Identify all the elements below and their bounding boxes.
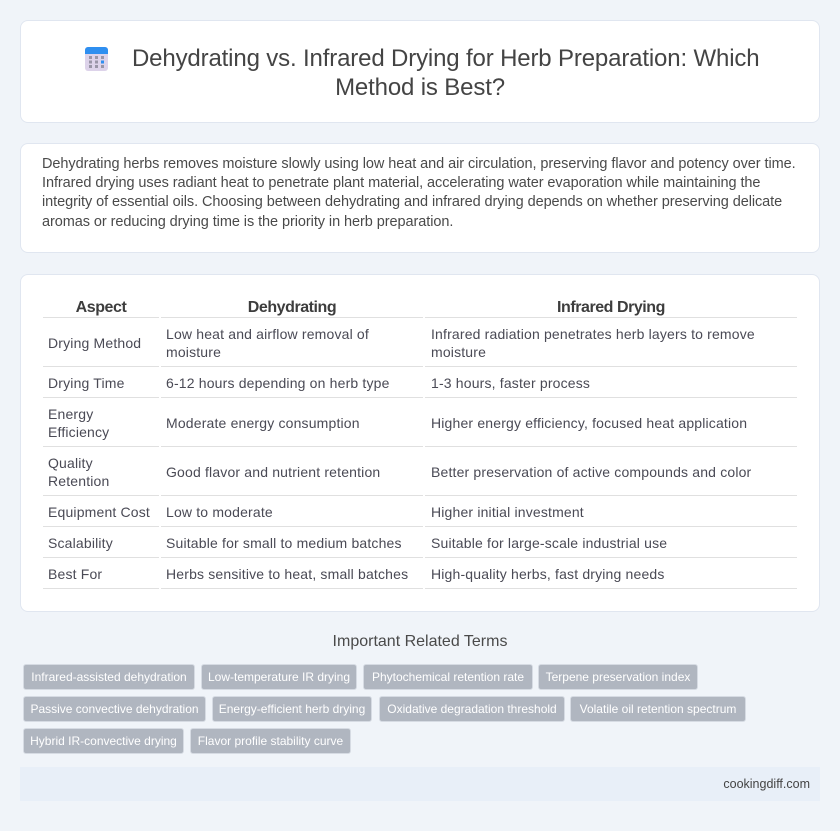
tag [190, 728, 351, 754]
tag: Hybrid IR-convective drying [30, 734, 177, 748]
footer source text: cookingdiff.com [723, 777, 810, 791]
text block: description: aromas or reducing drying time is the priority in herb preparation. [42, 214, 453, 230]
row: equipment cost: Low to moderate [166, 504, 273, 520]
row: drying time [48, 375, 590, 391]
tag: Energy-efficient herb drying [219, 702, 365, 716]
tag: Flavor profile stability curve [198, 734, 343, 748]
row: drying time: 1-3 hours, faster process [431, 375, 590, 391]
row: drying method: Infrared radiation penetrates herb layers to remove [431, 326, 755, 342]
tag [212, 696, 372, 722]
row: scalability: Scalability [48, 535, 113, 551]
row: energy efficiency: Efficiency [48, 424, 109, 440]
text block: description: integrity of essential oils. Choosing between dehydrating and infrared drying depends on whether preserving delicate [42, 194, 782, 210]
icon: calendar [85, 47, 108, 71]
row: best for [48, 566, 665, 582]
table: comparison [43, 299, 797, 589]
row: equipment cost: Higher initial investment [431, 504, 584, 520]
row: drying method [48, 326, 755, 360]
tag [201, 664, 357, 690]
row: energy efficiency: Higher energy efficiency, focused heat application [431, 415, 747, 431]
row: best for: High-quality herbs, fast drying needs [431, 566, 665, 582]
table header: Infrared Drying [557, 299, 665, 316]
text block: description [42, 156, 796, 230]
tag [23, 696, 206, 722]
panel: description [20, 143, 820, 253]
row: drying time: 6-12 hours depending on herb type [166, 375, 390, 391]
row: quality retention: Better preservation of active compounds and color [431, 464, 751, 480]
tag: Passive convective dehydration [30, 702, 199, 716]
tag [23, 664, 195, 690]
row: scalability: Suitable for large-scale industrial use [431, 535, 667, 551]
tag: Volatile oil retention spectrum [580, 702, 736, 716]
row: best for: Best For [48, 566, 102, 582]
tag: Infrared-assisted dehydration [31, 670, 187, 684]
row: energy efficiency: Moderate energy consumption [166, 415, 360, 431]
tag list: related terms [23, 664, 746, 754]
tag [23, 728, 184, 754]
row: quality retention [48, 455, 751, 489]
title [132, 45, 759, 101]
row: quality retention: Good flavor and nutrient retention [166, 464, 380, 480]
row: drying method: Low heat and airflow removal of [166, 326, 369, 342]
tag: Terpene preservation index [546, 670, 690, 684]
title: Method is Best? [335, 74, 505, 101]
tag [363, 664, 533, 690]
row: quality retention: Quality [48, 455, 93, 471]
row: drying method: moisture [166, 344, 221, 360]
row: equipment cost: Equipment Cost [48, 504, 150, 520]
row: drying method: Drying Method [48, 335, 141, 351]
row: best for: Herbs sensitive to heat, small batches [166, 566, 408, 582]
row: drying method: moisture [431, 344, 486, 360]
table header: Aspect [76, 299, 126, 316]
row: energy efficiency: Energy [48, 406, 93, 422]
table header [76, 299, 665, 316]
title: Dehydrating vs. Infrared Drying for Herb Preparation: Which [132, 45, 759, 72]
row: equipment cost [48, 504, 584, 520]
row: quality retention: Retention [48, 473, 109, 489]
panel: comparison table [20, 274, 820, 612]
table header: Dehydrating [248, 299, 336, 316]
row: scalability: Suitable for small to medium batches [166, 535, 402, 551]
heading: related terms: Important Related Terms [333, 633, 507, 650]
tag [538, 664, 698, 690]
tag: Oxidative degradation threshold [387, 702, 557, 716]
row: drying time: Drying Time [48, 375, 125, 391]
text block: description: Infrared drying uses radiant heat to penetrate plant material, accelerating water evaporation while maintaining the [42, 175, 760, 191]
tag [379, 696, 565, 722]
footer [20, 767, 820, 801]
row: scalability [48, 535, 667, 551]
tag: Phytochemical retention rate [372, 670, 524, 684]
tag [570, 696, 746, 722]
text block: description: Dehydrating herbs removes moisture slowly using low heat and air circulation, preserving flavor and potency over time. [42, 156, 796, 172]
row: energy efficiency [48, 406, 747, 440]
panel: title [20, 20, 820, 123]
tag: Low-temperature IR drying [208, 670, 350, 684]
